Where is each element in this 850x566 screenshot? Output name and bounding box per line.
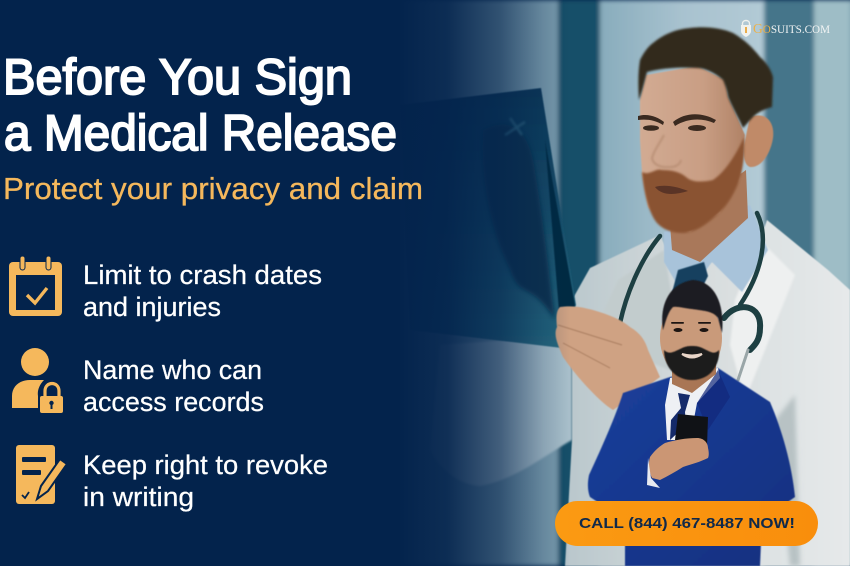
attorney suit — [588, 368, 795, 566]
text: limit to crash dates: Limit to crash dates — [83, 260, 322, 290]
doctor's nose — [652, 135, 681, 167]
heading: a Medical Release — [4, 105, 397, 161]
attorney phone — [675, 414, 708, 447]
text: name who can access records: access records — [83, 387, 264, 417]
doctor's hand — [556, 306, 660, 410]
lapel shading — [697, 370, 730, 430]
text: limit to crash dates: and injuries — [83, 292, 221, 322]
necktie — [670, 262, 708, 320]
text: name who can access records — [83, 355, 264, 417]
shirt cuff — [647, 458, 660, 488]
navy fade over photo — [395, 0, 570, 566]
icon: document with pencil — [16, 445, 67, 504]
doctor's beard — [642, 137, 744, 233]
attorney eyes — [671, 322, 711, 332]
text: keep right to revoke — [83, 450, 328, 512]
coat lapel shading — [590, 250, 680, 370]
doctor's ear — [744, 115, 773, 167]
attorney necktie — [670, 393, 690, 440]
attorney neck — [672, 350, 716, 393]
stethoscope — [620, 213, 763, 380]
doctor's eyes and brows — [638, 114, 716, 194]
text: keep right to revoke: Keep right to revoke — [83, 450, 328, 480]
far sleeve — [430, 335, 572, 486]
icon: person with padlock — [12, 348, 63, 413]
icon: calendar with check — [9, 256, 62, 316]
doctor's face — [640, 66, 745, 232]
brand logo — [741, 20, 830, 37]
list item: limit to crash dates — [9, 256, 322, 322]
attorney smile — [682, 354, 702, 358]
heading: Before You Sign — [3, 49, 352, 105]
attorney portrait — [588, 280, 795, 566]
logo wordmark: GOSUITS.COM — [753, 22, 830, 37]
text: keep right to revoke: in writing — [83, 482, 194, 512]
text: name who can access records: Name who can — [83, 355, 262, 385]
subheading: Protect your privacy and claim — [3, 171, 423, 206]
call-to-action button: CALL (844) 467-8487 NOW! — [579, 515, 795, 532]
attorney shirt — [665, 368, 720, 440]
shirt collar — [664, 205, 768, 298]
attorney hair — [662, 280, 723, 333]
attorney beard — [664, 346, 719, 380]
call-to-action button — [555, 501, 818, 546]
lab coat — [565, 220, 850, 566]
blurred hospital window background — [400, 0, 850, 566]
list item: keep right to revoke — [16, 445, 328, 512]
doctor's neck — [670, 170, 748, 262]
text: limit to crash dates — [83, 260, 322, 322]
doctor's hair — [638, 27, 773, 128]
x-ray film — [400, 88, 576, 348]
photo: doctor examining x-ray — [400, 0, 850, 566]
attorney hand — [649, 438, 709, 480]
list item: name who can access records — [12, 348, 264, 417]
heading — [3, 49, 397, 161]
logo lock icon — [741, 20, 751, 37]
attorney face — [660, 298, 722, 378]
